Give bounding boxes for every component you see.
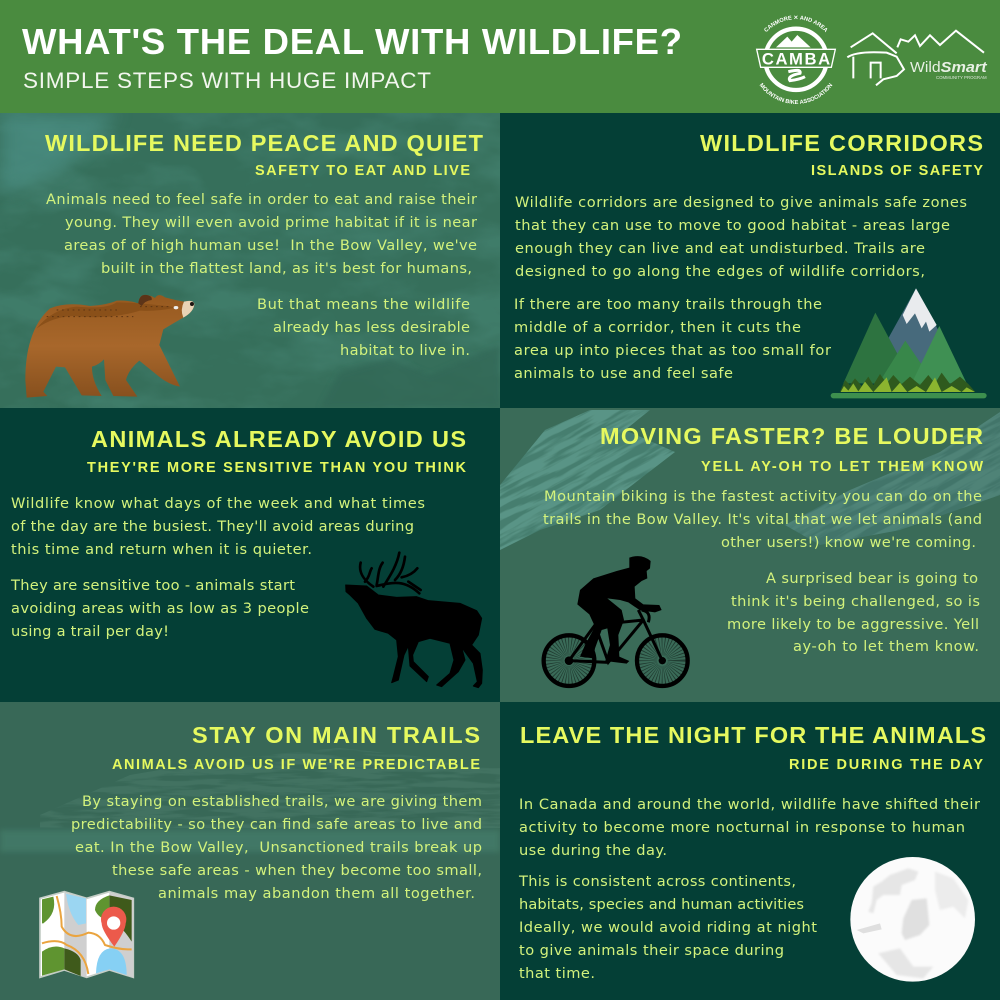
body text: middle of a corridor, then it cuts the	[514, 319, 801, 336]
icon: full moon	[850, 857, 975, 982]
body text: enough they can live and eat undisturbed. Trails are	[515, 240, 925, 257]
body text: habitats, species and human activities	[519, 896, 804, 913]
body text: think it's being challenged, so is	[731, 593, 980, 610]
logo: WildSmart: COMMUNITY PROGRAM	[936, 75, 987, 80]
icon: elk silhouette	[346, 553, 482, 688]
body text: animals to use and feel safe	[514, 365, 733, 382]
subheading: ISLANDS OF SAFETY	[811, 163, 983, 179]
body text: areas of of high human use! In the Bow Valley, we've	[64, 237, 477, 254]
body text: area up into pieces that as too small for	[514, 342, 831, 359]
body text: trails in the Bow Valley. It's vital that we let animals (and	[543, 511, 982, 528]
heading: WILDLIFE NEED PEACE AND QUIET	[45, 130, 484, 156]
body text	[518, 796, 980, 982]
body text: of the day are the busiest. They'll avoid areas during	[11, 518, 414, 535]
panel: moving faster? be louder	[500, 408, 1000, 702]
heading: ANIMALS ALREADY AVOID US	[91, 426, 466, 452]
body text: ay-oh to let them know.	[793, 638, 979, 655]
subheading: SAFETY TO EAT AND LIVE	[255, 163, 470, 179]
body text: this time and return when it is quieter.	[11, 541, 312, 558]
body text: Ideally, we would avoid riding at night	[519, 919, 817, 936]
panel: stay on main trails	[0, 702, 500, 1000]
panel: wildlife need peace and quiet	[0, 113, 500, 408]
body text: They are sensitive too - animals start	[10, 577, 295, 594]
logo: WildSmart: Smart	[941, 60, 988, 76]
logo: CAMBA: CAMBA	[762, 49, 830, 68]
body text: Mountain biking is the fastest activity you can do on the	[544, 488, 982, 505]
body text	[46, 191, 477, 359]
body text: Wildlife corridors are designed to give animals safe zones	[515, 194, 967, 211]
subheading: YELL AY-OH TO LET THEM KNOW	[701, 459, 983, 475]
body text: In Canada and around the world, wildlife have shifted their	[519, 796, 980, 813]
body text	[71, 793, 482, 902]
icon: mountains	[831, 288, 987, 398]
body text: already has less desirable	[273, 319, 470, 336]
body text	[543, 488, 982, 655]
subheading: THEY'RE MORE SENSITIVE THAN YOU THINK	[87, 460, 467, 476]
icon: bear	[25, 295, 194, 398]
header band	[0, 0, 1000, 113]
subheading: ANIMALS AVOID US IF WE'RE PREDICTABLE	[112, 757, 480, 773]
icon: map with pin	[40, 892, 133, 977]
body text: eat. In the Bow Valley, Unsanctioned trails break up	[75, 839, 482, 856]
panel: leave the night for the animals	[500, 702, 1000, 997]
body text: young. They will even avoid prime habitat if it is near	[65, 214, 477, 231]
heading: WILDLIFE CORRIDORS	[700, 130, 983, 156]
title: WHAT'S THE DEAL WITH WILDLIFE?	[22, 21, 682, 62]
panel: animals already avoid us	[0, 408, 500, 702]
body text: more likely to be aggressive. Yell	[727, 616, 979, 633]
subheading: RIDE DURING THE DAY	[789, 757, 983, 773]
body text: This is consistent across continents,	[518, 873, 796, 890]
body text: But that means the wildlife	[257, 296, 470, 313]
logo: CAMBA	[756, 16, 836, 104]
body text: A surprised bear is going to	[766, 570, 978, 587]
panel: wildlife corridors	[500, 113, 1000, 408]
body text: avoiding areas with as low as 3 people	[11, 600, 309, 617]
body text: If there are too many trails through the	[514, 296, 822, 313]
body text: to give animals their space during	[519, 942, 784, 959]
subtitle: SIMPLE STEPS WITH HUGE IMPACT	[23, 68, 431, 93]
body text: Wildlife know what days of the week and what times	[11, 495, 425, 512]
body text: animals may abandon them all together.	[158, 885, 475, 902]
body text: predictability - so they can find safe areas to live and	[71, 816, 482, 833]
body text: other users!) know we're coming.	[721, 534, 976, 551]
body text: designed to go along the edges of wildlife corridors,	[515, 263, 925, 280]
body text: By staying on established trails, we are giving them	[82, 793, 482, 810]
logo: CAMBA: CANMORE ✕ AND AREA	[764, 16, 828, 32]
heading: MOVING FASTER? BE LOUDER	[600, 423, 983, 449]
body text: that they can use to move to good habitat - areas large	[515, 217, 950, 234]
body text: habitat to live in.	[340, 342, 470, 359]
body text	[10, 495, 425, 640]
body text: that time.	[519, 965, 595, 982]
body text	[514, 194, 967, 382]
body text: these safe areas - when they become too small,	[112, 862, 482, 879]
icon: cyclist silhouette	[544, 556, 688, 686]
heading: LEAVE THE NIGHT FOR THE ANIMALS	[520, 722, 986, 748]
body text: activity to become more nocturnal in response to human	[519, 819, 965, 836]
logo: WildSmart	[847, 31, 988, 85]
logo: WildSmart: Wild	[910, 60, 941, 76]
heading: STAY ON MAIN TRAILS	[192, 722, 480, 748]
logo: CAMBA: MOUNTAIN BIKE ASSOCIATION	[760, 82, 832, 104]
body text: use during the day.	[519, 842, 667, 859]
body text: built in the flattest land, as it's best for humans,	[101, 260, 472, 277]
body text: Animals need to feel safe in order to eat and raise their	[46, 191, 477, 208]
body text: using a trail per day!	[11, 623, 169, 640]
